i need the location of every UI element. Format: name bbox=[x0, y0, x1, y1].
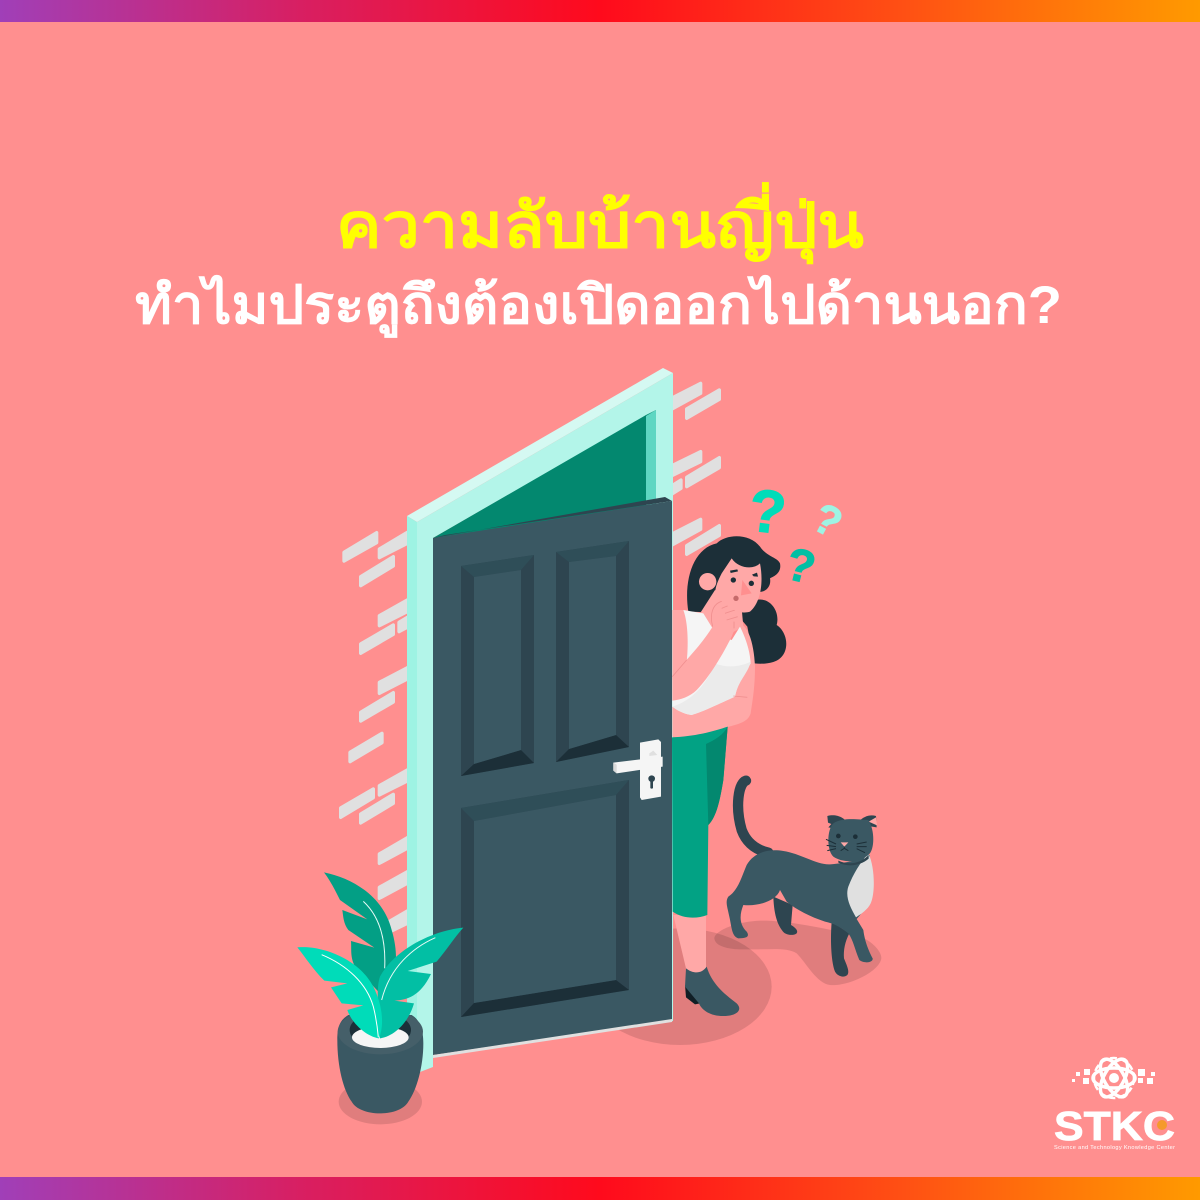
boot bbox=[685, 967, 739, 1016]
cat far legs bbox=[773, 897, 849, 977]
door top edge bbox=[433, 497, 672, 538]
opening, inner jamb bbox=[646, 410, 656, 505]
soil bbox=[352, 1027, 409, 1048]
cat ears bbox=[827, 815, 877, 828]
ear bbox=[699, 573, 716, 590]
pot bbox=[337, 1015, 423, 1113]
door handle bbox=[613, 739, 663, 800]
question marks bbox=[745, 476, 850, 594]
top gradient bar bbox=[0, 0, 1200, 22]
title line 1: ความลับบ้านญี่ปุ่น bbox=[336, 182, 864, 264]
logo atom icon bbox=[1093, 1055, 1135, 1101]
STKC logo bbox=[1054, 1055, 1175, 1151]
woman bbox=[672, 558, 762, 737]
door frame bbox=[407, 368, 673, 1072]
cat head bbox=[828, 819, 873, 861]
title bbox=[135, 182, 1062, 338]
forearm and hand bbox=[672, 600, 738, 701]
back leaf bbox=[324, 872, 396, 993]
neck bbox=[700, 590, 743, 640]
face bbox=[715, 558, 762, 613]
panel: upper left bbox=[461, 555, 534, 776]
finger and arm creases bbox=[672, 600, 747, 697]
logo pixel squares bbox=[1072, 1069, 1155, 1084]
cat collar shade bbox=[838, 855, 869, 865]
shirt bbox=[672, 610, 751, 715]
pot rim bbox=[338, 1009, 423, 1054]
frame top edge bbox=[407, 368, 673, 522]
question mark medium: ? bbox=[781, 537, 821, 594]
eyes and brows bbox=[730, 569, 758, 586]
trousers shade bbox=[706, 727, 728, 825]
mole bbox=[733, 596, 739, 601]
left leaf bbox=[297, 947, 382, 1038]
boot heel bbox=[685, 985, 700, 1004]
left shoulder bbox=[672, 610, 688, 680]
door slab bbox=[433, 501, 672, 1055]
cat face bbox=[826, 834, 867, 853]
door bbox=[433, 497, 672, 1058]
pot opening bbox=[350, 1012, 411, 1048]
frame front face bbox=[417, 373, 673, 1072]
title line 2: ทำไมประตูถึงต้องเปิดออกไปด้านนอก? bbox=[135, 274, 1062, 338]
frame left side face bbox=[407, 516, 417, 1072]
nose bbox=[741, 580, 752, 595]
opening, dark green interior bbox=[433, 410, 656, 540]
panel: lower bbox=[461, 780, 629, 1017]
woman: trousers and boot bbox=[672, 727, 739, 1016]
cat chest bbox=[847, 853, 874, 917]
right leaf bbox=[378, 928, 463, 1038]
cat tail bbox=[738, 781, 768, 853]
cat shadow bbox=[714, 921, 881, 985]
bricks on wall, left side bbox=[341, 532, 407, 974]
logo tagline: Science and Technology Knowledge Center bbox=[1054, 1145, 1175, 1151]
shirt shading bbox=[672, 662, 751, 715]
cat body bbox=[727, 850, 873, 962]
bricks on wall, right side bbox=[672, 383, 719, 554]
pot shadow bbox=[339, 1079, 422, 1124]
panel: upper right bbox=[556, 541, 629, 762]
bottom gradient bar bbox=[0, 1177, 1200, 1200]
logo wordmark: STKC bbox=[1054, 1103, 1175, 1149]
potted plant bbox=[297, 872, 463, 1124]
question mark large: ? bbox=[745, 476, 790, 547]
question mark faint: ? bbox=[805, 493, 850, 547]
person floor shadow bbox=[588, 928, 772, 1045]
leg bbox=[673, 915, 706, 974]
logo orange dot bbox=[1157, 1120, 1167, 1130]
woman: hair behind bbox=[687, 536, 786, 664]
cat bbox=[714, 781, 881, 985]
trousers bbox=[672, 727, 728, 918]
door sill highlight bbox=[433, 1019, 672, 1058]
right arm bbox=[672, 623, 755, 737]
